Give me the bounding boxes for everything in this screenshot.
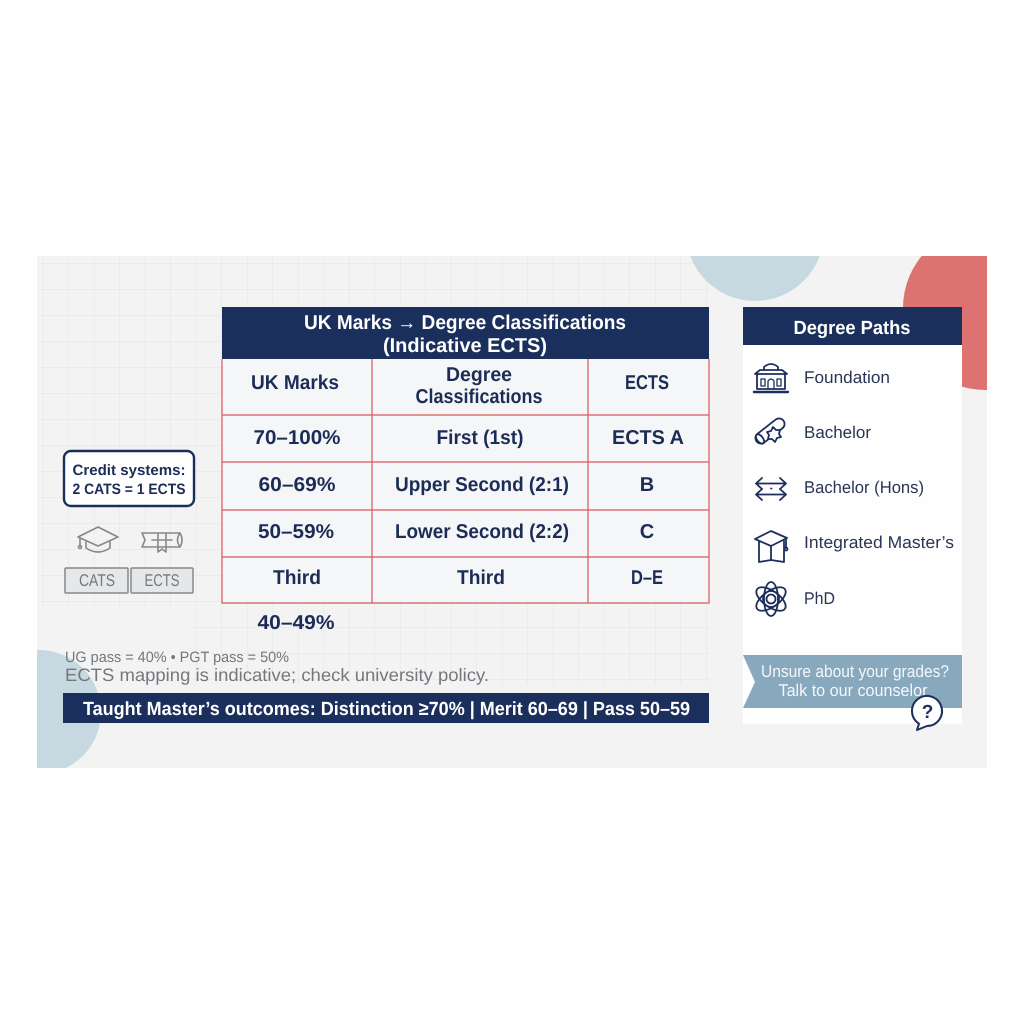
banner: taught master's outcomes: Taught Master’s outcomes: Distinction ≥70% | Merit 60–69 | Pass 50–59 bbox=[83, 699, 690, 720]
decorative circle: light blue top bbox=[690, 256, 820, 301]
degree paths heading: Degree Paths bbox=[794, 318, 910, 339]
row: first: First (1st) bbox=[436, 427, 524, 449]
icon: question speech bubble bbox=[912, 696, 942, 730]
path: integrated master's: Integrated Master’s bbox=[804, 533, 954, 552]
row: upper second: 60–69% bbox=[258, 474, 336, 496]
path: integrated master's bbox=[755, 531, 954, 562]
decorative circle: red top right bbox=[903, 256, 987, 390]
decorative circle: light blue bottom left bbox=[37, 650, 100, 768]
icon: diploma scroll bbox=[142, 533, 182, 552]
banner: counselor call to action: Talk to our counselor bbox=[778, 681, 928, 700]
table grid bbox=[222, 359, 709, 603]
row: third: Third bbox=[273, 567, 321, 589]
label: ECTS: ECTS bbox=[144, 571, 180, 590]
column headers: Classifications bbox=[416, 386, 542, 408]
column headers: UK Marks bbox=[251, 372, 339, 394]
label: CATS bbox=[65, 568, 128, 593]
path: bachelor hons: Bachelor (Hons) bbox=[804, 478, 924, 497]
degree paths heading bbox=[743, 307, 962, 345]
panel: background bbox=[37, 256, 987, 768]
row: first: 70–100% bbox=[254, 427, 341, 449]
banner: counselor call to action bbox=[743, 655, 962, 708]
icon: question speech bubble: ? bbox=[922, 702, 933, 723]
path: foundation bbox=[754, 364, 890, 392]
banner: counselor call to action: Unsure about your grades? bbox=[761, 662, 949, 681]
column headers: ECTS bbox=[625, 372, 669, 394]
callout: credit systems: 2 CATS = 1 ECTS bbox=[72, 481, 186, 498]
row: third bbox=[273, 567, 663, 589]
row: first bbox=[254, 427, 684, 449]
row: lower second: C bbox=[640, 521, 654, 543]
column headers bbox=[251, 364, 669, 408]
path: bachelor: Bachelor bbox=[804, 423, 871, 442]
panel: classification table bbox=[222, 307, 709, 634]
row: lower second: 50–59% bbox=[258, 521, 334, 543]
row: upper second bbox=[258, 474, 654, 496]
column headers: Degree bbox=[446, 364, 512, 386]
row: upper second: B bbox=[640, 474, 654, 496]
path: bachelor bbox=[753, 416, 871, 446]
path: bachelor hons bbox=[756, 478, 924, 500]
path: PhD bbox=[752, 582, 835, 616]
callout: credit systems: Credit systems: bbox=[72, 462, 186, 479]
table title bar: UK Marks → Degree Classifications bbox=[304, 312, 626, 334]
path: foundation: Foundation bbox=[804, 368, 890, 387]
row: lower second bbox=[258, 521, 654, 543]
text block: ECTS mapping note: ECTS mapping is indicative; check university policy. bbox=[65, 665, 489, 685]
row: lower second: Lower Second (2:2) bbox=[395, 521, 569, 543]
icon: graduation cap bbox=[78, 527, 118, 552]
label: ECTS bbox=[131, 568, 193, 593]
panel: degree paths bbox=[743, 307, 962, 730]
overflow mark range: 40–49% bbox=[258, 612, 335, 634]
row: third: D–E bbox=[631, 567, 663, 589]
table title bar bbox=[222, 307, 709, 359]
callout: credit systems bbox=[64, 451, 194, 506]
label: CATS: CATS bbox=[79, 571, 115, 590]
row: upper second: Upper Second (2:1) bbox=[395, 474, 569, 496]
row: third: Third bbox=[457, 567, 505, 589]
text block: pass marks note: UG pass = 40% • PGT pass = 50% bbox=[65, 649, 289, 666]
banner: taught master's outcomes bbox=[63, 693, 709, 723]
row: first: ECTS A bbox=[612, 427, 684, 449]
table title bar: (Indicative ECTS) bbox=[383, 335, 547, 357]
path: PhD: PhD bbox=[804, 589, 835, 608]
